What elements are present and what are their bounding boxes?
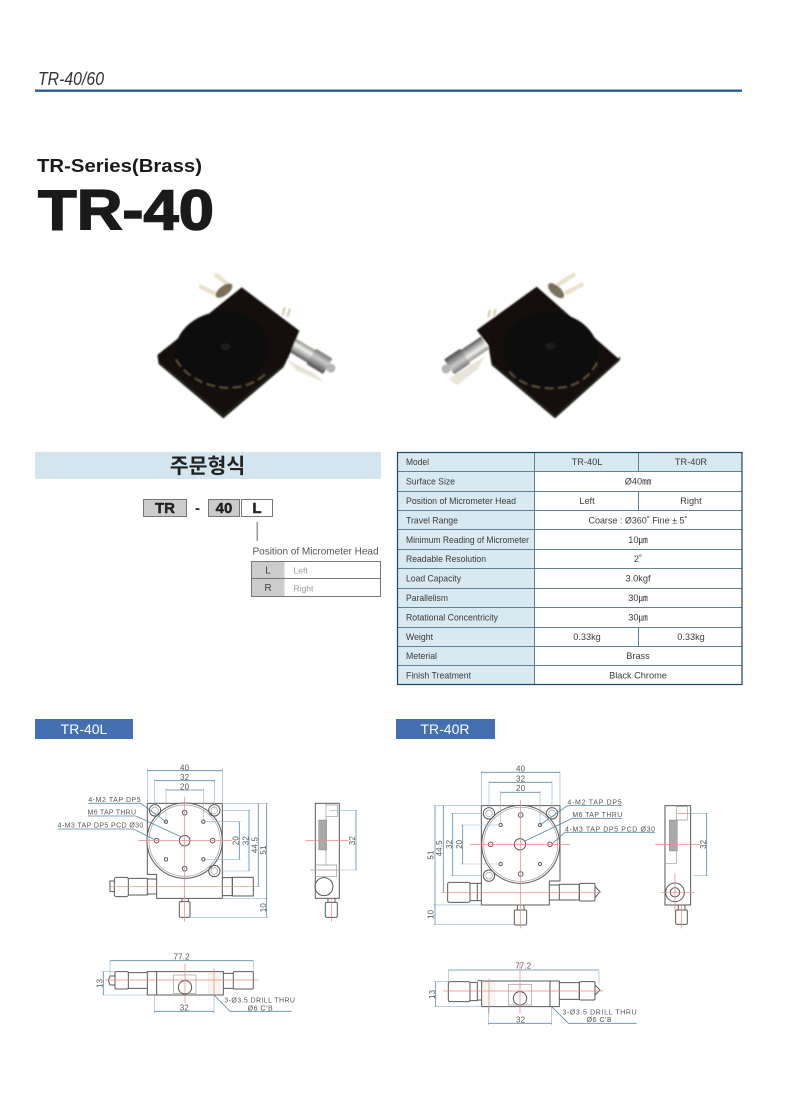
drawing: TR-40L top view: 20	[180, 783, 190, 792]
drawing: TR-40R top view: 32	[516, 774, 526, 783]
model code boxes: 40	[216, 500, 232, 517]
product photo: left micrometer variant	[157, 274, 339, 418]
drawing: TR-40L side view: 32	[348, 836, 357, 845]
specification table: Finish Treatment	[406, 670, 471, 682]
specification table: Right	[680, 496, 702, 506]
model code boxes: TR	[155, 500, 175, 517]
drawing: TR-40L top view: 4-M3 TAP DP5 PCD Ø30	[58, 822, 143, 829]
model code boxes: -	[195, 500, 200, 517]
drawing: TR-40R side view: 32	[699, 839, 708, 849]
drawing: TR-40R front view: Ø6 C'B	[587, 1017, 612, 1024]
drawing: TR-40R top view	[427, 764, 655, 928]
drawing: TR-40L side view	[306, 803, 357, 922]
option caption: Position of Micrometer Head	[252, 546, 378, 558]
option table: Left	[294, 566, 308, 576]
drawing: TR-40L front view: 13	[95, 978, 104, 988]
drawing: TR-40R top view: 4-M2 TAP DP5	[567, 799, 622, 806]
option table: R	[264, 583, 272, 594]
drawing: TR-40R top view: 32	[445, 839, 454, 849]
specification table: Travel Range	[406, 516, 458, 526]
page header label: TR-40/60	[38, 68, 105, 89]
drawing: TR-40R top view: 51	[427, 850, 436, 860]
drawing: TR-40L top view: M6 TAP THRU	[88, 809, 136, 816]
specification table: 0.33kg	[573, 632, 601, 642]
drawing: TR-40R front view: 13	[428, 989, 437, 999]
specification table: Model	[406, 457, 429, 468]
specification table: 2˚	[634, 554, 642, 564]
product photo: right micrometer variant	[437, 274, 620, 418]
drawing: TR-40R top view: 20	[516, 784, 526, 793]
drawing: TR-40L top view: 44.5	[251, 837, 260, 853]
drawing: TR-40R top view: 40	[516, 764, 526, 773]
order format heading bar: 주문형식	[170, 455, 245, 478]
drawing: TR-40R front view: 3-Ø3.5 DRILL THRU	[562, 1010, 637, 1017]
drawing: TR-40L top view	[57, 763, 268, 922]
connector line	[256, 522, 258, 541]
specification table: Rotational Concentricity	[406, 612, 498, 624]
specification table: Meterial	[406, 651, 437, 662]
specification table: 30㎛	[628, 612, 648, 624]
drawing: TR-40L top view: 32	[180, 773, 190, 782]
drawing: TR-40R side view	[655, 806, 708, 928]
order format heading bar	[35, 452, 381, 479]
drawing: TR-40L front view: 77.2	[174, 952, 190, 961]
specification table: Parallelism	[406, 593, 448, 604]
option table: Right	[294, 584, 314, 594]
drawing: TR-40L top view: 20	[232, 836, 241, 845]
specification table: Weight	[406, 632, 433, 643]
drawing: TR-40L top view: 4-M2 TAP DP5	[88, 797, 141, 804]
specification table: Readable Resolution	[406, 554, 486, 565]
specification table: Brass	[626, 651, 650, 661]
specification table: Left	[579, 496, 595, 506]
drawing: TR-40L top view: 51	[259, 845, 268, 855]
specification table: Black Chrome	[609, 670, 667, 680]
drawing: TR-40L front view	[95, 952, 295, 1013]
specification table: TR-40L	[572, 457, 602, 467]
drawing: TR-40R top view: 10	[427, 909, 436, 919]
section tab: TR-40L	[35, 719, 133, 739]
drawing: TR-40L front view: 32	[180, 1003, 189, 1012]
specification table: TR-40R	[675, 457, 707, 467]
specification table: Minimum Reading of Micrometer	[406, 535, 529, 546]
specification table	[397, 452, 742, 685]
specification table: Coarse : Ø360˚ Fine ± 5˚	[588, 516, 688, 526]
drawing: TR-40L top view: 40	[180, 763, 190, 772]
model code boxes: L	[252, 500, 262, 517]
drawing: TR-40L front view: Ø6 C'B	[248, 1005, 273, 1012]
main title: TR-40	[38, 178, 214, 242]
option table: L	[265, 566, 271, 576]
specification table: Surface Size	[406, 476, 455, 488]
drawing: TR-40R top view: M6 TAP THRU	[572, 812, 622, 819]
drawing: TR-40L top view: 10	[259, 903, 268, 912]
option table	[252, 562, 380, 596]
drawing: TR-40R front view: 77.2	[515, 962, 532, 971]
specification table: 0.33kg	[677, 632, 705, 642]
series subtitle: TR-Series(Brass)	[37, 156, 202, 176]
drawing: TR-40R top view: 20	[455, 839, 464, 849]
specification table: 30㎛	[628, 593, 648, 604]
drawing: TR-40R front view: 32	[516, 1015, 526, 1024]
specification table: Ø40㎜	[625, 476, 651, 486]
specification table: Position of Micrometer Head	[406, 496, 516, 507]
drawing: TR-40R front view	[428, 962, 637, 1025]
drawing: TR-40R top view: 4-M3 TAP DP5 PCD Ø30	[565, 826, 655, 833]
section tab: TR-40R	[396, 719, 495, 739]
specification table: Load Capacity	[406, 574, 461, 584]
section tab: TR-40R: TR-40R	[420, 721, 470, 737]
drawing: TR-40R top view: 44.5	[435, 840, 444, 856]
model code boxes	[144, 500, 272, 517]
panel: order format	[35, 452, 381, 596]
section tab: TR-40L: TR-40L	[61, 721, 108, 737]
drawing: TR-40L top view: 32	[241, 836, 250, 845]
drawing: TR-40L front view: 3-Ø3.5 DRILL THRU	[224, 998, 295, 1005]
specification table: 10㎛	[628, 535, 648, 546]
specification table: 3.0kgf	[625, 574, 651, 584]
